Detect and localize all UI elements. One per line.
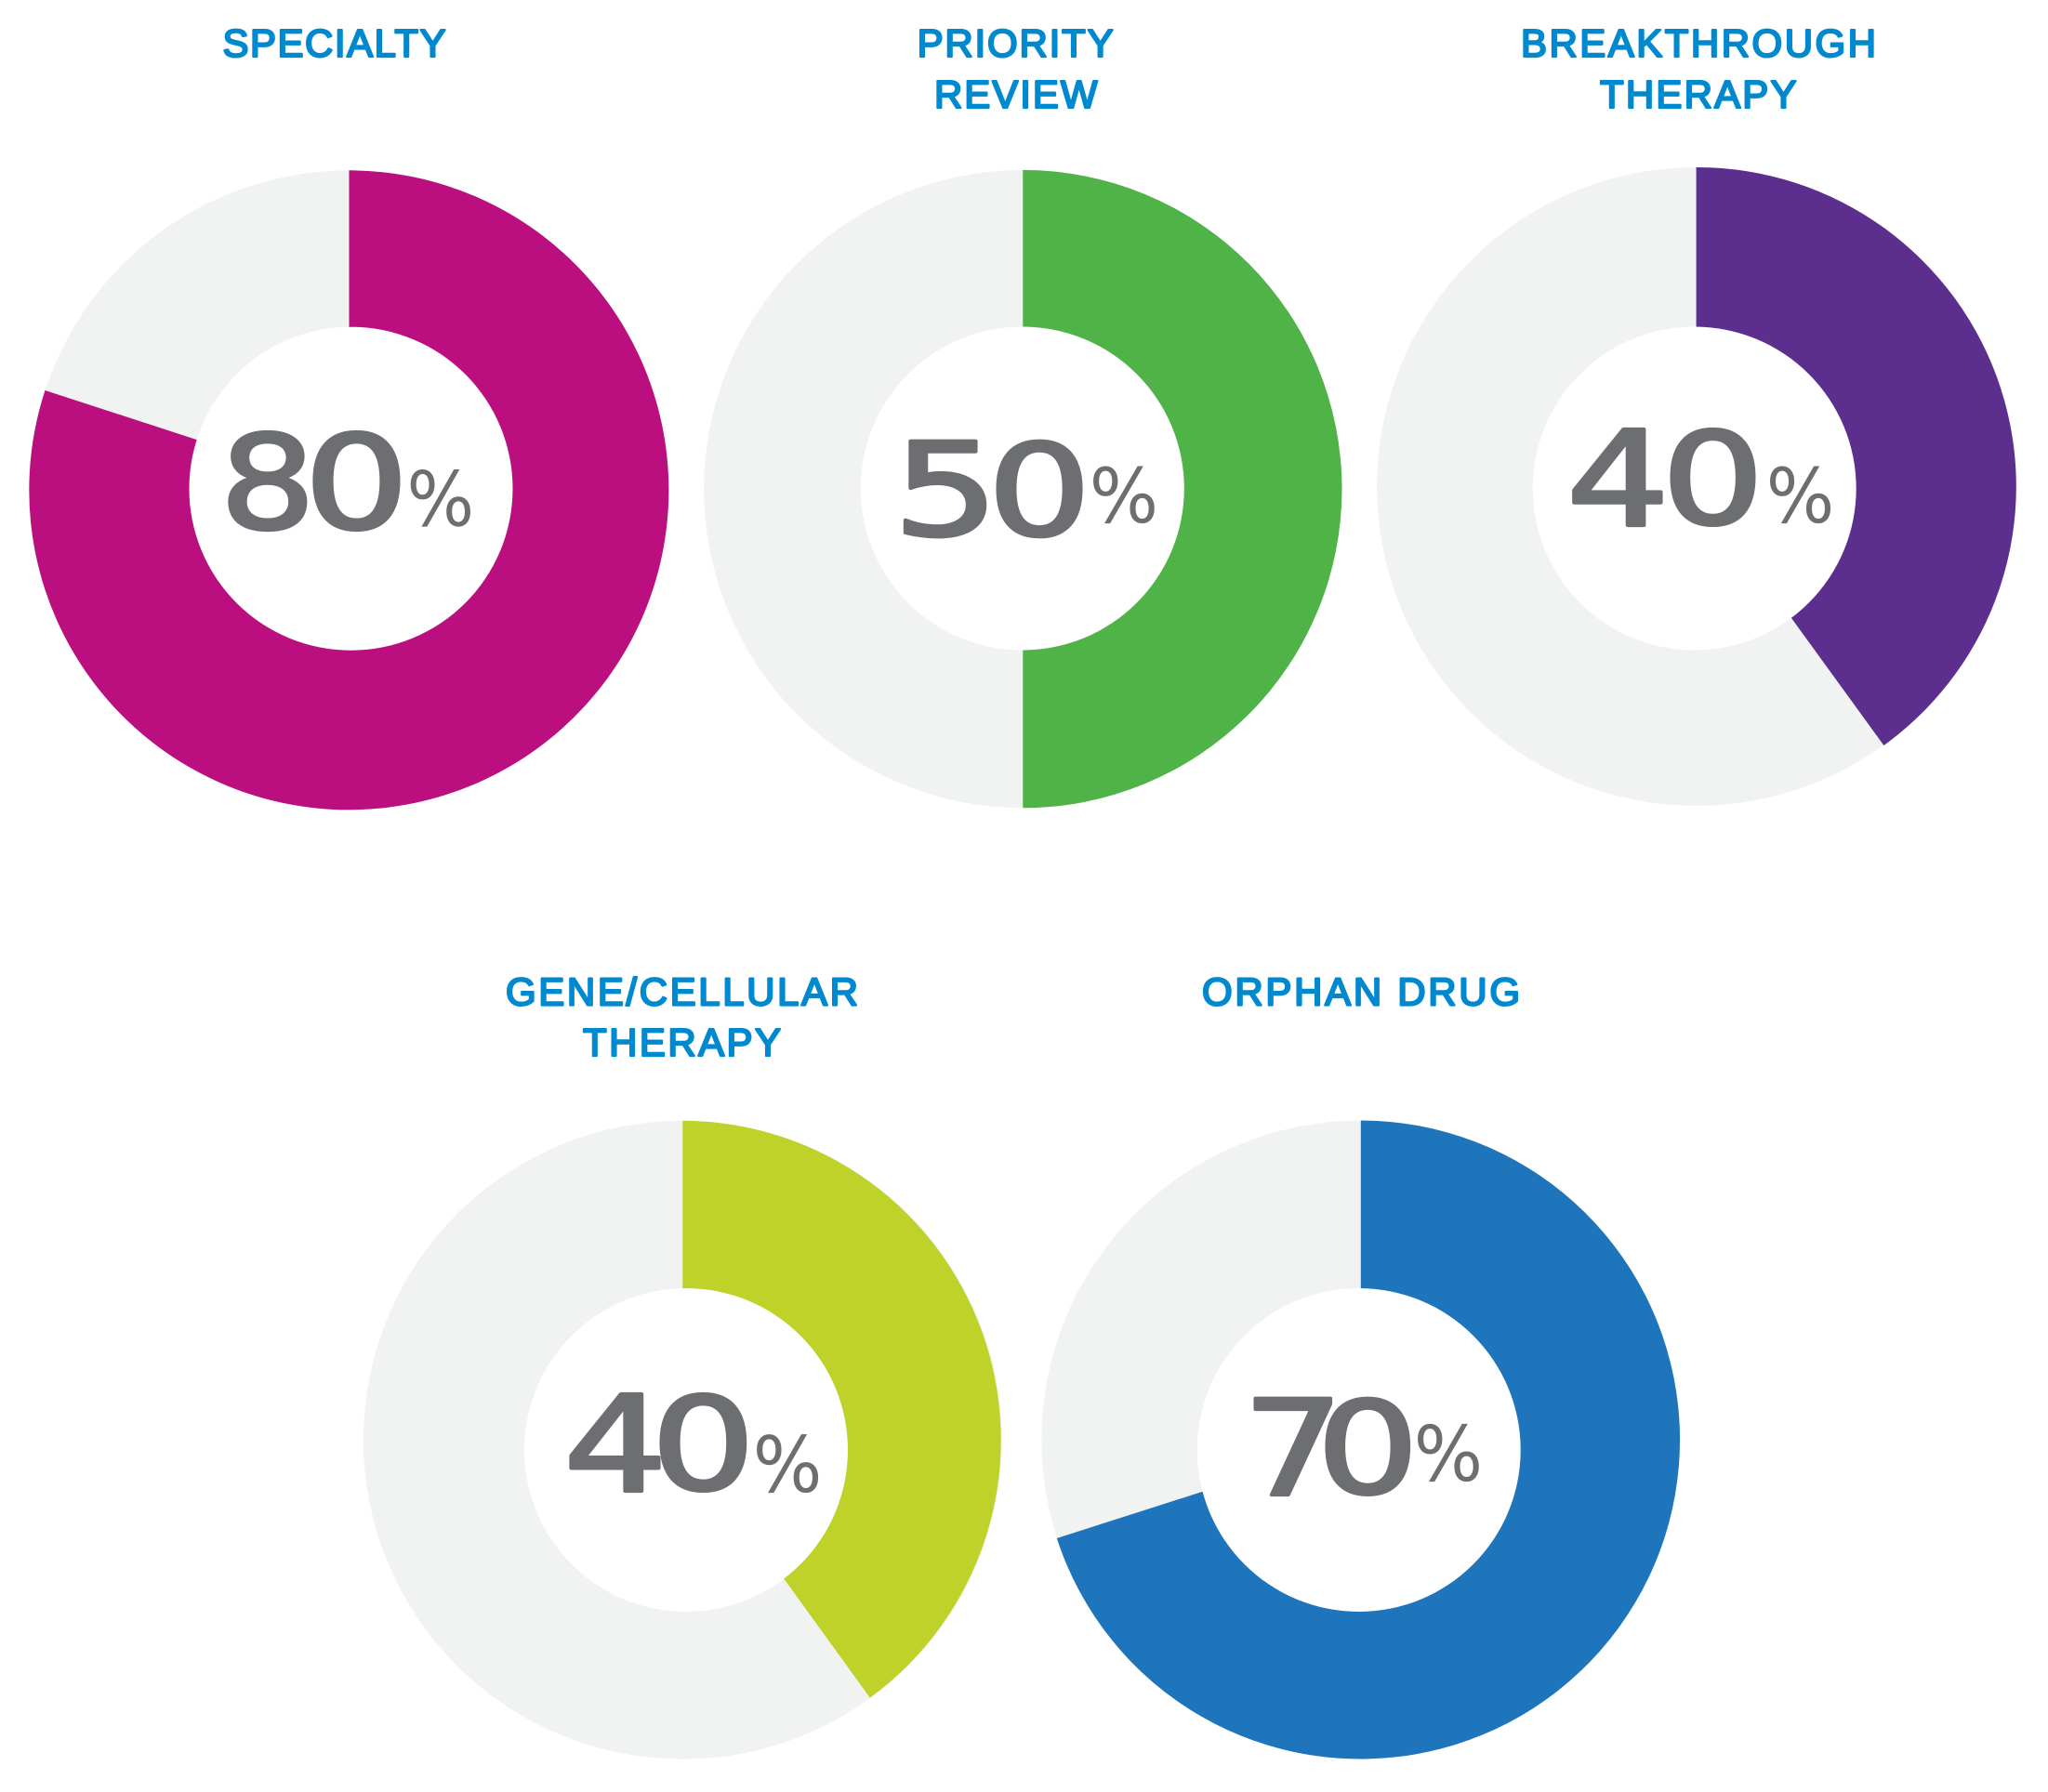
value: 80%: 0 [304, 407, 409, 560]
heading: specialty: SPECIALTY [223, 21, 446, 65]
value: 70% [1243, 1372, 1483, 1526]
heading: orphan drug: ORPHAN DRUG [1202, 970, 1520, 1013]
value: 40% [1566, 402, 1834, 557]
value: 70%: 0 [1316, 1375, 1419, 1523]
panel: orphan drug [1041, 970, 1680, 1759]
heading: gene/cellular therapy: THERAPY [583, 1021, 781, 1064]
donut chart: breakthrough therapy 40% [1377, 167, 2016, 806]
panel: priority review [704, 21, 1342, 808]
panel: breakthrough therapy [1377, 21, 2016, 806]
value: 50%: 0 [987, 417, 1091, 565]
value: 40%: 0 [1661, 405, 1764, 554]
heading: breakthrough therapy [1521, 21, 1876, 116]
heading: priority review [918, 21, 1114, 116]
value: 80% [219, 407, 474, 560]
donut chart: gene/cellular therapy 40% [363, 1121, 1002, 1759]
heading: breakthrough therapy: BREAKTHROUGH [1521, 21, 1876, 65]
value: 40%: % [1766, 452, 1834, 541]
value: 70%: % [1414, 1409, 1483, 1499]
heading: priority review: REVIEW [934, 72, 1098, 116]
panel: specialty [29, 21, 668, 810]
donut chart: orphan drug 70% [1041, 1121, 1680, 1759]
donut chart: specialty 80% [29, 170, 668, 810]
value: 40%: 0 [651, 1370, 756, 1520]
heading: priority review: PRIORITY [918, 21, 1114, 65]
value: 80%: 8 [219, 407, 315, 560]
value: 50%: % [1090, 452, 1158, 541]
value: 70%: 7 [1243, 1372, 1343, 1526]
value: 50% [892, 415, 1158, 566]
value: 40%: 4 [1566, 402, 1670, 557]
heading: breakthrough therapy: THERAPY [1600, 72, 1796, 116]
value: 40%: % [753, 1419, 822, 1510]
heading: gene/cellular therapy: GENE/CELLULAR [506, 970, 858, 1013]
value: 40% [563, 1367, 822, 1523]
value: 40%: 4 [563, 1367, 667, 1523]
value: 50%: 5 [892, 415, 999, 566]
heading: gene/cellular therapy [506, 970, 858, 1064]
value: 80%: % [407, 455, 474, 544]
donut chart: priority review 50% [704, 170, 1342, 808]
panel: gene/cellular therapy [363, 970, 1002, 1759]
